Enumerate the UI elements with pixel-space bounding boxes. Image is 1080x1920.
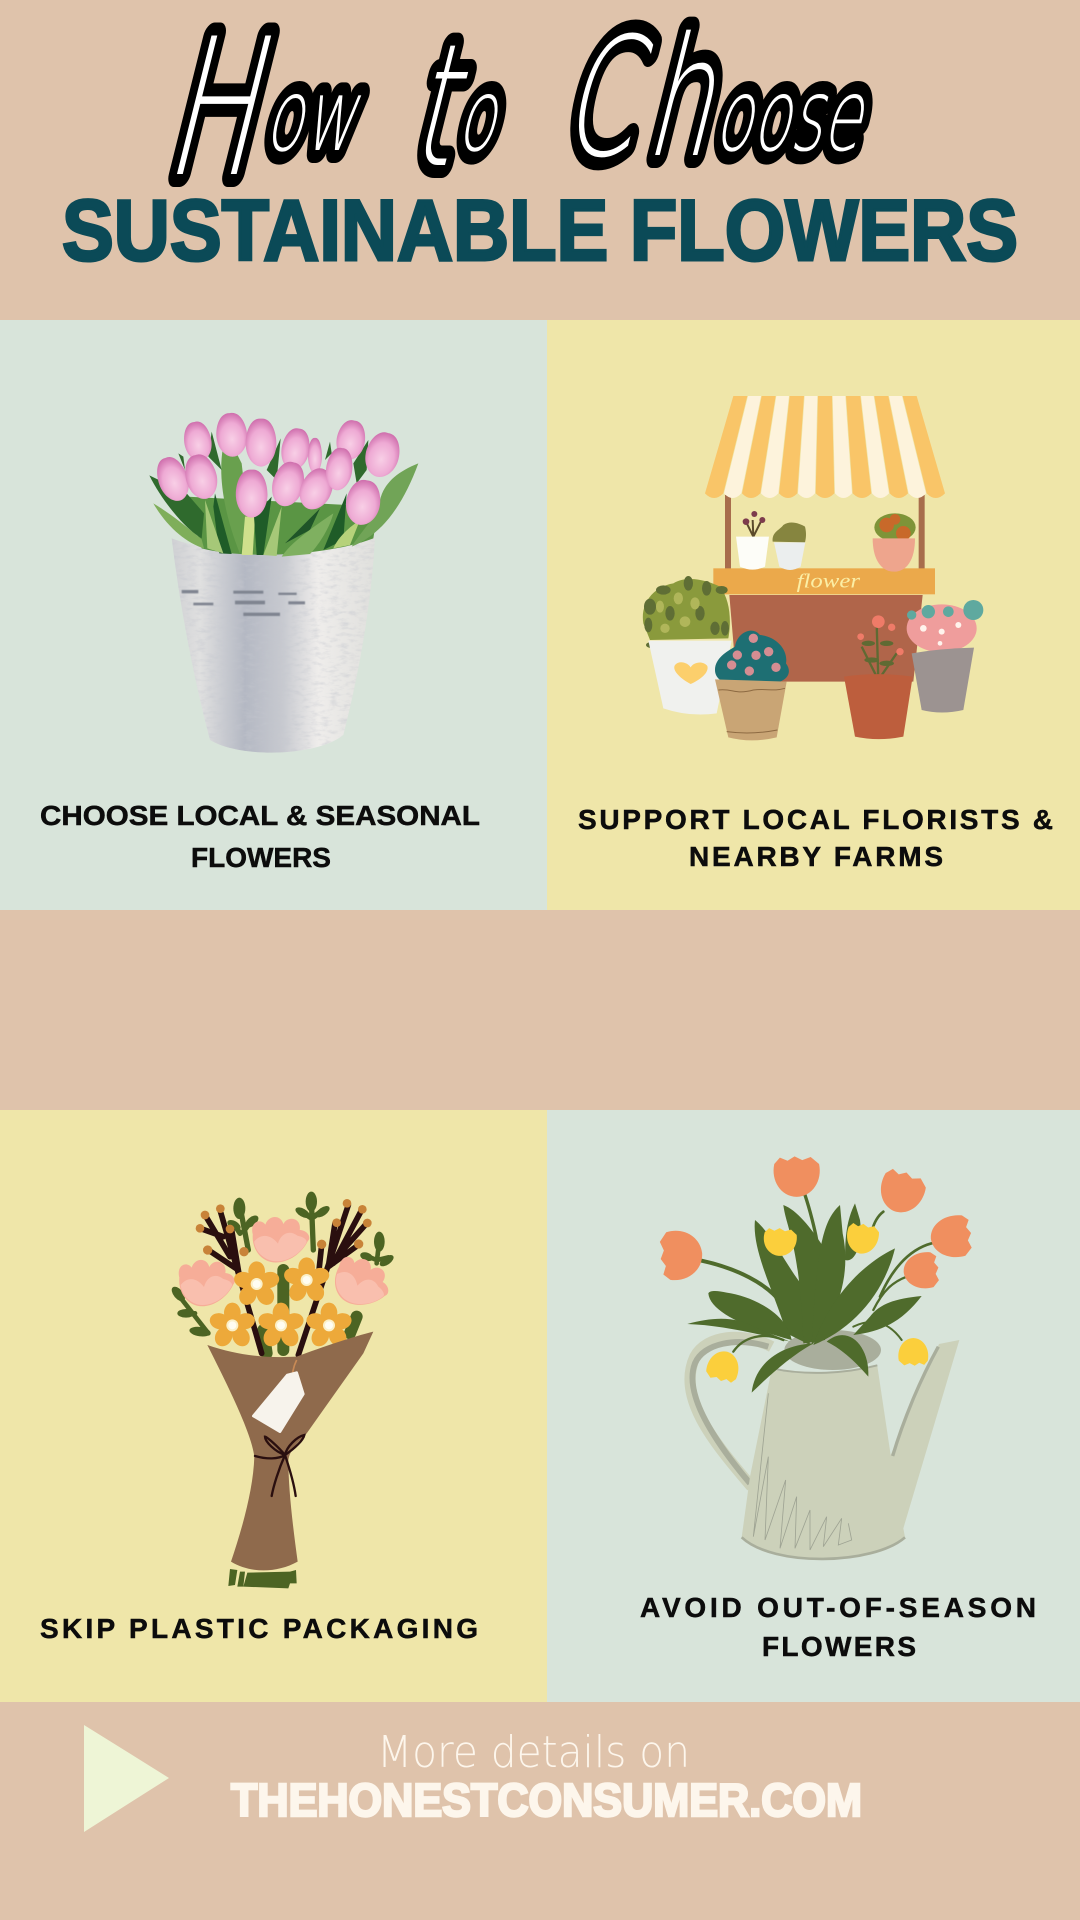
caption second line: FLOWERS [191, 842, 331, 873]
white pot with heart and leafy plant [643, 576, 732, 715]
yellow tulips [704, 1221, 928, 1385]
green sprigs [169, 1192, 396, 1353]
kraft paper wrap [207, 1332, 373, 1570]
stall posts [725, 495, 925, 570]
icon: play arrow [84, 1725, 169, 1832]
spout shadow and base rim [742, 1347, 938, 1559]
script heading: How to Choose: H [151, 0, 295, 220]
panel background mint [547, 1110, 1080, 1702]
tan pot with teal plant [715, 631, 789, 740]
icon: bouquet wrapped in brown paper [169, 1192, 397, 1588]
panel: support local florists and nearby farms [547, 320, 1080, 910]
caption: skip plastic packaging: SKIP PLASTIC PACKAGING [40, 1613, 478, 1644]
caption: choose local and seasonal flowers: CHOOSE LOCAL & SEASONAL [40, 800, 480, 831]
paper gift tag [253, 1373, 303, 1432]
text: more details on: More details on [377, 1727, 690, 1778]
text: website: THEHONESTCONSUMER.COM [231, 1774, 862, 1826]
caption: support local florists: SUPPORT LOCAL FLORISTS & [578, 804, 1053, 835]
panel: skip plastic packaging [0, 1110, 547, 1702]
caption second line: flowers: FLOWERS [762, 1631, 916, 1662]
terracotta pot with flowers [844, 615, 913, 739]
orange tulips [658, 1156, 973, 1290]
counter top with sign [713, 568, 935, 594]
script heading: How to Choose: oose [707, 58, 882, 175]
scribble decoration [753, 1393, 852, 1550]
orange flowers [208, 1257, 353, 1349]
icon: tulips in a watering can [658, 1156, 973, 1559]
title [62, 0, 1018, 279]
black bow [255, 1435, 304, 1496]
can neck opening [784, 1330, 881, 1370]
script heading: How to Choose: C [550, 3, 669, 195]
icon: flower market stall [643, 396, 983, 740]
paper fringe [228, 1569, 297, 1588]
panel background mint [0, 320, 547, 910]
icon: tulips in a metal bucket [149, 412, 418, 753]
script heading: How to Choose: o [450, 58, 516, 175]
panel: choose local and seasonal flowers [0, 320, 547, 910]
can body and spout [742, 1340, 959, 1559]
panel background yellow [547, 320, 1080, 910]
pink tulips [179, 1217, 397, 1316]
small potted plants on counter [736, 511, 916, 572]
pink tulip blooms [152, 412, 404, 528]
tulip foliage [149, 432, 418, 557]
dark branches with orange berries [196, 1199, 372, 1355]
script heading: How to Choose: ow [257, 58, 377, 175]
bucket [172, 537, 375, 753]
script heading: How to Choose: t [398, 9, 489, 206]
script heading: How to Choose: h [634, 3, 746, 195]
panel background yellow [0, 1110, 547, 1702]
gray pot with pink blossoms [907, 600, 983, 712]
caption: avoid out-of-season: AVOID OUT-OF-SEASON [640, 1592, 1036, 1623]
caption second line: nearby farms: NEARBY FARMS [689, 841, 943, 872]
counter top with sign: flower [797, 570, 860, 592]
string [292, 1360, 297, 1382]
stall counter body [729, 595, 923, 682]
footer call to action [84, 1725, 862, 1832]
panel: avoid out-of-season flowers [547, 1110, 1080, 1702]
striped awning [705, 396, 945, 498]
stems and leaves [687, 1195, 932, 1393]
can handle [690, 1337, 772, 1487]
